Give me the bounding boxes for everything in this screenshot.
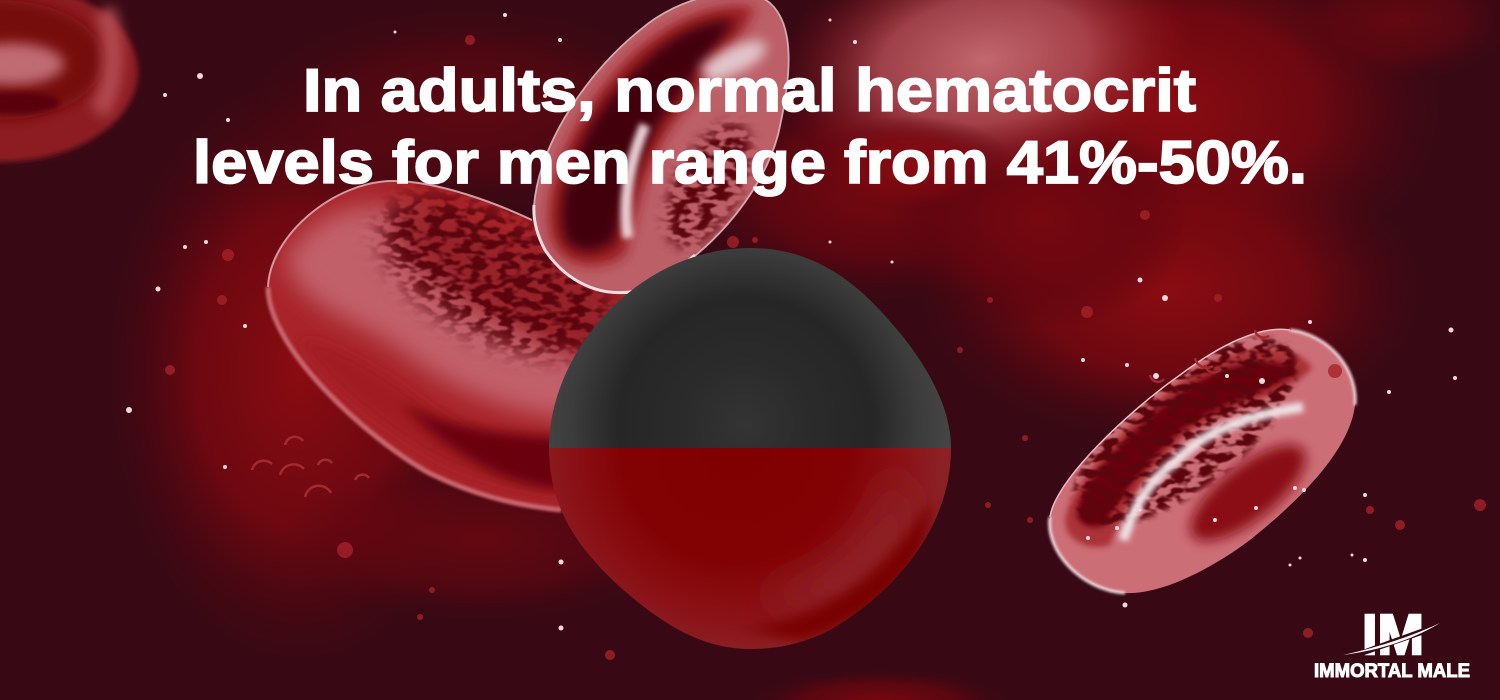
title [193, 57, 1307, 196]
logo wordmark: IMMORTAL MALE [1314, 660, 1470, 682]
red blood cell: right [1050, 329, 1355, 593]
title line 2: levels for men range from 41%-50%. [193, 129, 1307, 196]
red blood cell: top [534, 0, 789, 293]
red blood cell: left [268, 170, 650, 515]
logo monogram: IM [1362, 603, 1424, 667]
blurred cell: bottom [755, 670, 1005, 700]
blurred cell: top left [0, 0, 138, 162]
title line 1: In adults, normal hematocrit [303, 57, 1196, 124]
logo: Immortal Male [1314, 603, 1470, 682]
hematocrit ratio cell [540, 240, 960, 658]
blurred cell: top right [760, 0, 1210, 215]
